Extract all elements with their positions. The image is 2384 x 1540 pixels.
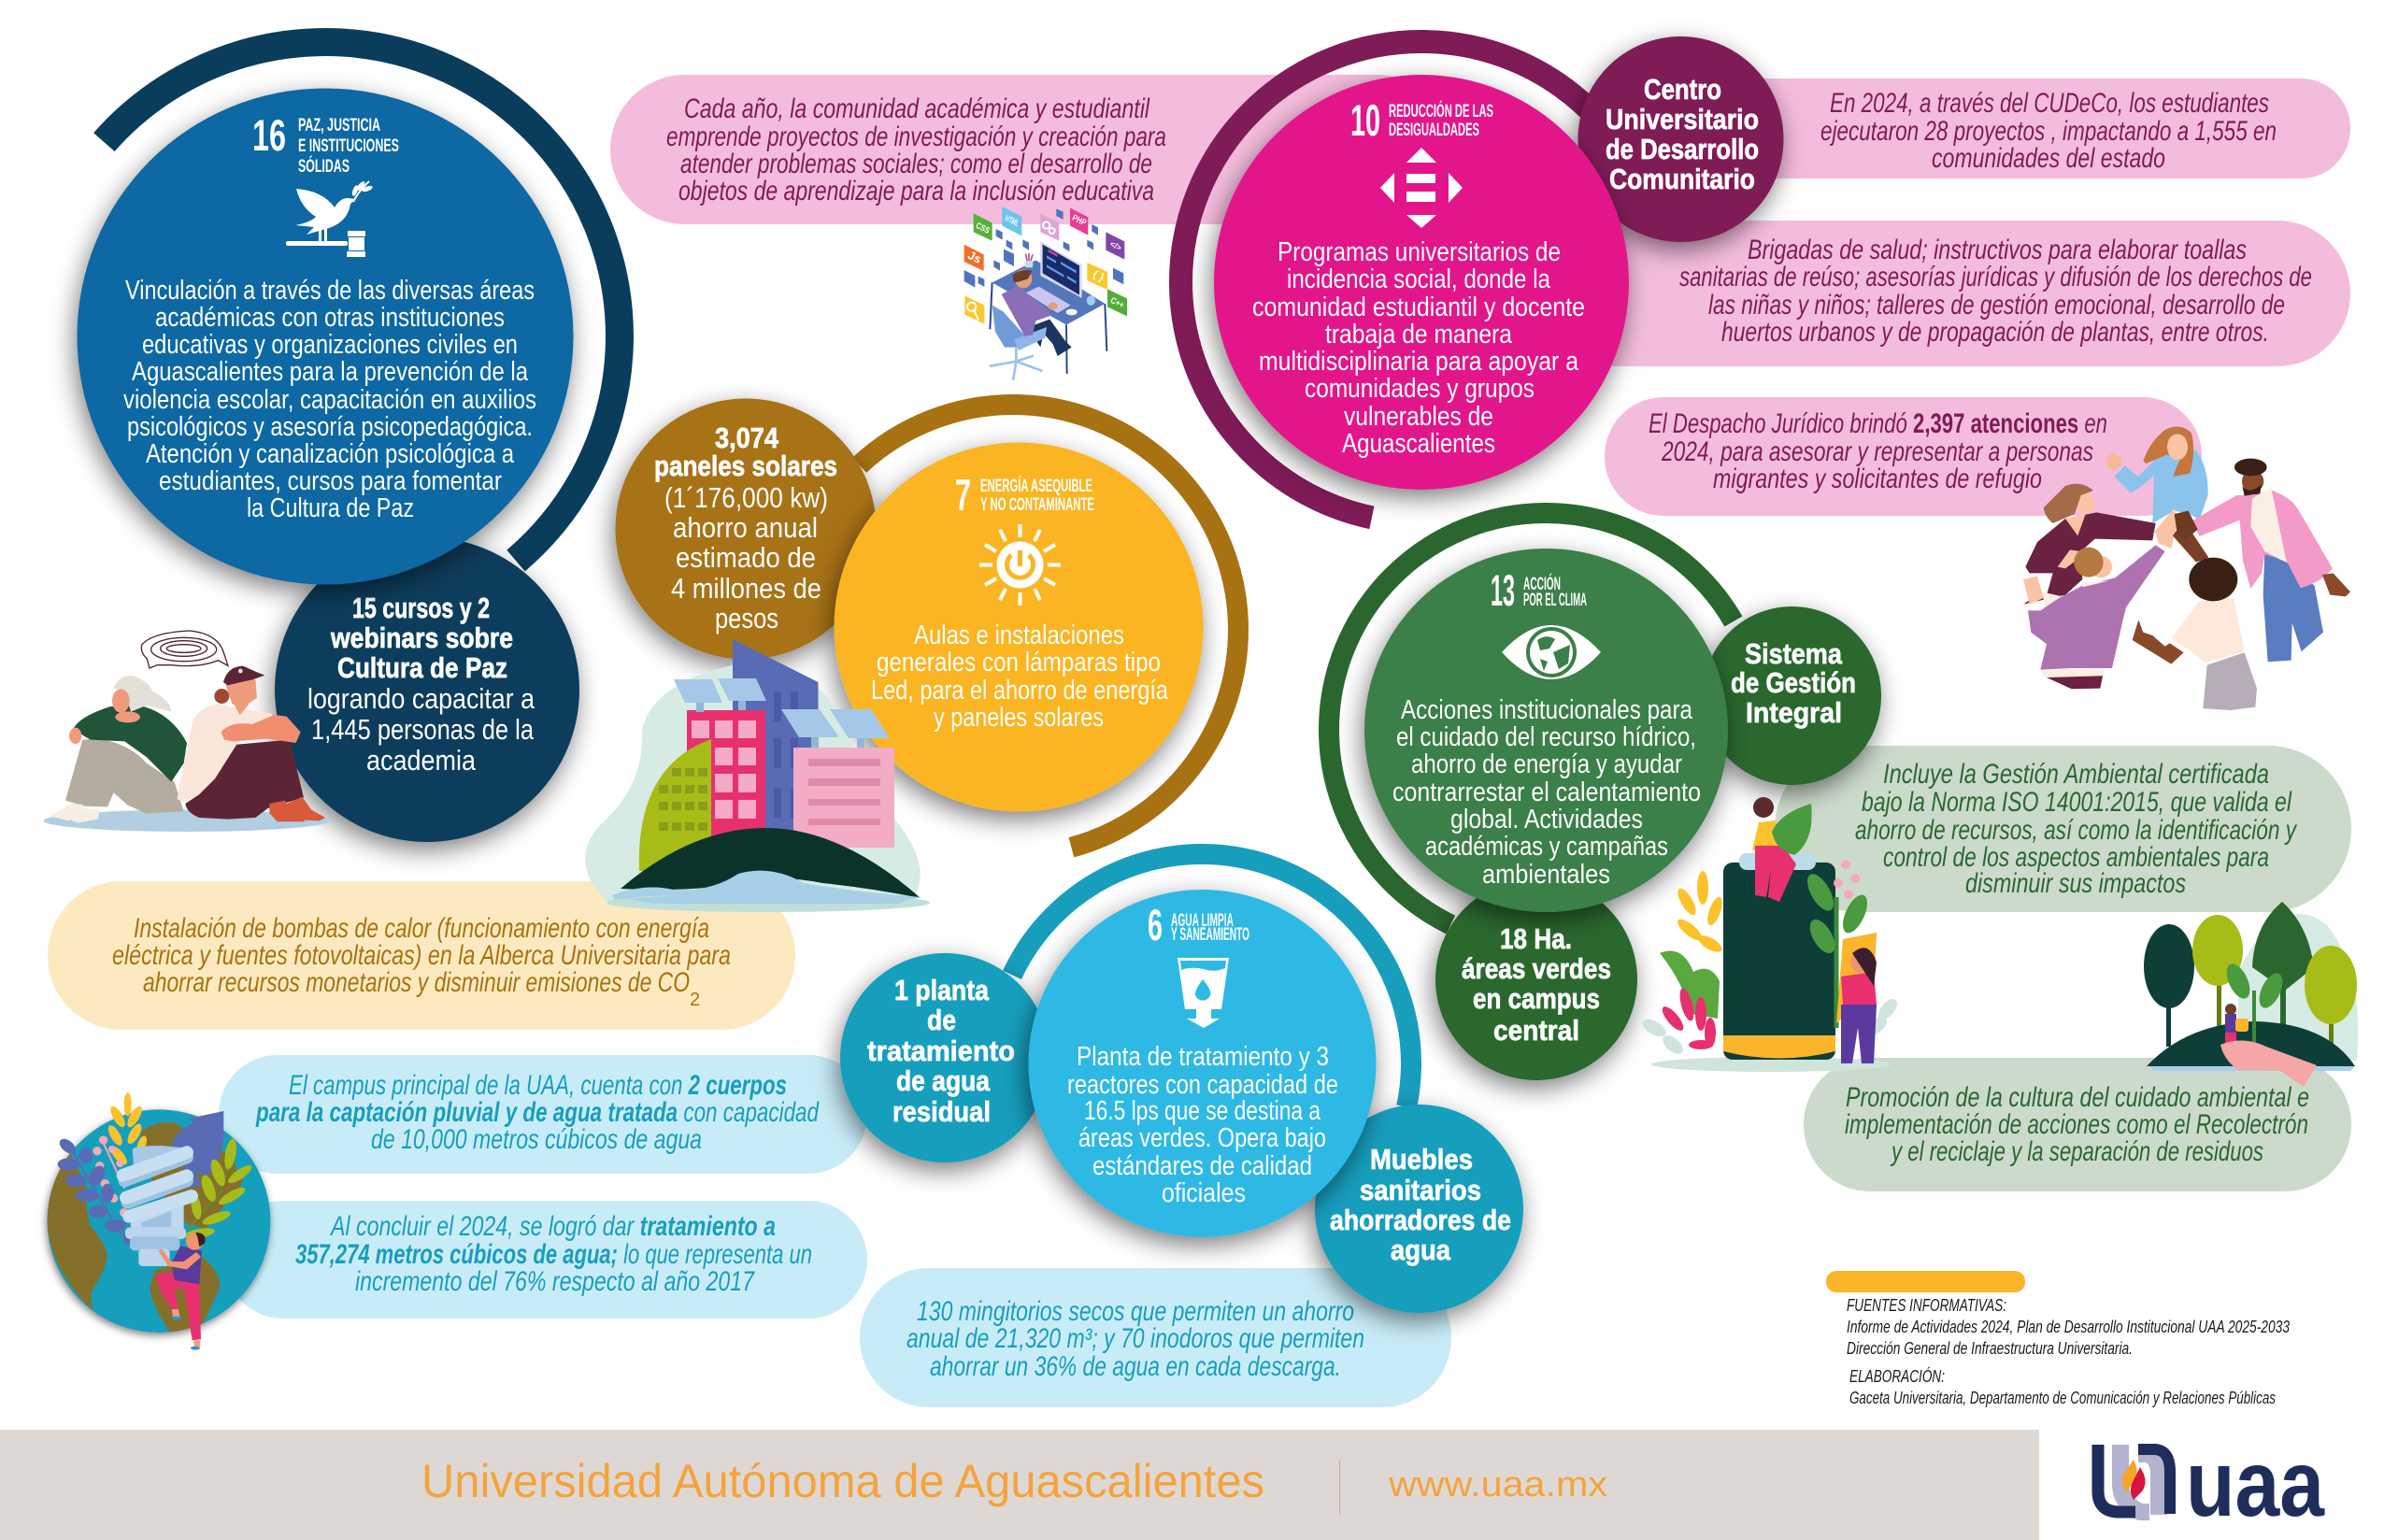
description: Programas universitarios de (1278, 237, 1561, 267)
circle: treatment plant: de agua (896, 1064, 991, 1097)
circle: solar panels: 4 millones de (671, 572, 821, 605)
ring (1012, 854, 1411, 1107)
main circle (1364, 549, 1728, 912)
pill: dry urinals (860, 1268, 1451, 1407)
circle: treatment plant: de (927, 1004, 956, 1036)
circle: treatment plant: tratamiento (867, 1034, 1015, 1067)
circle: Centro Universitario de Desarrollo Comunitario: Centro (1644, 73, 1721, 106)
description: Atención y canalización psicológica a (146, 439, 515, 469)
circle: courses and webinars: logrando capacitar a (307, 682, 535, 715)
description: global. Actividades (1450, 805, 1643, 834)
description: estudiantes, cursos para fomentar (159, 466, 502, 496)
pill: annual projects: emprende proyectos de investigación y creación para (666, 121, 1166, 152)
circle: green areas (1435, 878, 1637, 1080)
pill: environmental culture: y el reciclaje y la separación de residuos (1891, 1136, 2263, 1167)
pill: dry urinals: ahorrar un 36% de agua en cada descarga. (930, 1351, 1341, 1382)
description: áreas verdes. Opera bajo (1078, 1123, 1326, 1153)
circle: green areas: en campus (1473, 982, 1600, 1015)
icon: dove and gavel (286, 180, 373, 257)
illustration: column with plants and people (1639, 797, 1901, 1072)
description: Aulas e instalaciones (914, 620, 1124, 650)
goal heading (252, 110, 399, 177)
goal heading: 10 (1350, 95, 1380, 145)
circle: Centro Universitario de Desarrollo Comunitario: Comunitario (1609, 163, 1755, 195)
panel: SDG 10 reduced inequalities (1181, 36, 1783, 518)
pill: treated water: 357,274 metros cúbicos de agua; lo que representa un (295, 1239, 812, 1270)
description (1252, 237, 1585, 459)
description: multidisciplinaria para apoyar a (1259, 347, 1579, 377)
illustration: two people sitting (44, 631, 330, 832)
illustration: programmer at desk: C++ (1109, 295, 1126, 310)
goal heading: 7 (955, 470, 971, 520)
description: Aguascalientes para la prevención de la (132, 357, 529, 387)
goal heading: REDUCCIÓN DE LAS (1389, 101, 1493, 121)
pill: environmental management: control de los aspectos ambientales para (1883, 842, 2269, 873)
illustration: programmer at desk: CSS (974, 220, 992, 235)
icon: sun with power symbol (979, 524, 1061, 606)
goal heading (1491, 565, 1587, 615)
pill: health brigades: Brigadas de salud; instructivos para elaborar toallas (1748, 235, 2247, 265)
circle: solar panels: ahorro anual (673, 511, 818, 544)
description: comunidad estudiantil y docente (1252, 292, 1585, 322)
description: Led, para el ahorro de energía (871, 676, 1169, 706)
pill: heat pumps: ahorrar recursos monetarios y disminuir emisiones de CO (143, 967, 690, 998)
pill: CUDeCo projects: comunidades del estado (1932, 143, 2165, 174)
illustration: people high five (2023, 427, 2350, 710)
pill: treated water: incremento del 76% respecto al año 2017 (355, 1266, 755, 1297)
pill: heat pumps: eléctrica y fuentes fotovoltaicas) en la Alberca Universitaria para (112, 940, 731, 971)
description: ambientales (1482, 860, 1610, 890)
description: Aguascalientes (1342, 429, 1495, 459)
description: violencia escolar, capacitación en auxilios (123, 385, 536, 415)
goal heading: AGUA LIMPIA (1171, 911, 1234, 931)
circle: courses and webinars: 1,445 personas de la (311, 713, 535, 746)
description: reactores con capacidad de (1067, 1070, 1338, 1100)
ring (1329, 513, 1734, 925)
pill: heat pumps (48, 881, 795, 1030)
goal heading: ENERGÍA ASEQUIBLE (980, 476, 1092, 496)
description: académicas con otras instituciones (155, 303, 505, 333)
circle: sanitary furniture: agua (1391, 1233, 1451, 1266)
goal heading: POR EL CLIMA (1523, 591, 1587, 610)
pill: rainwater bodies: de 10,000 metros cúbicos de agua (371, 1124, 702, 1155)
circle: treatment plant: residual (892, 1095, 991, 1128)
circle: courses and webinars: webinars sobre (330, 621, 513, 654)
circle: solar panels: estimado de (676, 541, 816, 574)
pill: treated water (224, 1201, 867, 1319)
description: vulnerables de (1344, 402, 1493, 432)
panel: SDG 16 peace and justice (77, 42, 620, 842)
icon: inequality arrows (1380, 148, 1463, 228)
sources and credits: ELABORACIÓN: (1849, 1366, 1945, 1386)
circle: treatment plant (840, 953, 1049, 1162)
illustration: globe with light bulb (47, 1092, 270, 1350)
pill: environmental management (1775, 746, 2351, 912)
icon: eye with globe (1502, 625, 1601, 679)
description: la Cultura de Paz (247, 493, 414, 523)
circle: courses and webinars (275, 537, 579, 842)
circle: sanitary furniture: Muebles (1370, 1143, 1473, 1176)
goal heading: PAZ, JUSTICIA (298, 116, 380, 135)
goal heading (1148, 900, 1249, 949)
circle: solar panels: paneles solares (654, 449, 837, 482)
sources and credits (1847, 1296, 2290, 1407)
pill: environmental management: disminuir sus impactos (1965, 868, 2186, 899)
goal heading: ACCIÓN (1523, 574, 1561, 594)
circle: sanitary furniture (1315, 1105, 1523, 1313)
circle: treatment plant: 1 planta (894, 974, 990, 1006)
description (1067, 1042, 1338, 1208)
footer: university name: Universidad Autónoma de Aguascalientes (421, 1455, 1264, 1507)
description (1392, 695, 1701, 890)
circle: courses and webinars: academia (366, 744, 477, 777)
circle: Centro Universitario de Desarrollo Comunitario (1577, 36, 1783, 242)
circle: integrated management system: de Gestión (1731, 666, 1856, 699)
footer band (0, 1430, 2039, 1540)
goal heading: Y NO CONTAMINANTE (980, 495, 1094, 515)
main circle (77, 88, 574, 585)
circle: sanitary furniture: ahorradores de (1330, 1204, 1511, 1236)
illustration: programmer at desk: { } (1091, 269, 1106, 284)
description: incidencia social, donde la (1287, 264, 1551, 294)
circle: solar panels: 3,074 (715, 421, 779, 454)
sources and credits: FUENTES INFORMATIVAS: (1847, 1296, 2006, 1315)
description: contrarrestar el calentamiento (1392, 777, 1701, 807)
pill: legal office (1605, 397, 2202, 516)
ring (860, 405, 1238, 848)
circle: courses and webinars: 15 cursos y 2 (352, 592, 490, 624)
footer: website: www.uaa.mx (1388, 1465, 1607, 1504)
circle: Centro Universitario de Desarrollo Comunitario: Universitario (1606, 103, 1759, 135)
description: psicológicos y asesoría psicopedagógica. (127, 412, 533, 442)
goal heading (955, 470, 1094, 520)
pill: environmental culture (1804, 1058, 2351, 1191)
illustration: programmer at desk: HTML (1004, 213, 1021, 229)
goal heading: 13 (1491, 565, 1515, 615)
goal heading: 6 (1148, 900, 1163, 949)
pill: environmental management: Incluye la Gestión Ambiental certificada (1883, 759, 2269, 790)
circle: sanitary furniture: sanitarios (1360, 1174, 1481, 1206)
goal heading: 16 (252, 110, 286, 160)
pill: legal office: El Despacho Jurídico brindó 2,397 atenciones en (1649, 408, 2107, 439)
pill: health brigades (1542, 221, 2350, 366)
goal heading: E INSTITUCIONES (298, 136, 399, 156)
illustration: programmer at desk: </> (1108, 239, 1123, 252)
pill: rainwater bodies: El campus principal de la UAA, cuenta con 2 cuerpos (289, 1070, 787, 1101)
description (871, 620, 1169, 733)
goal heading: SÓLIDAS (298, 156, 350, 177)
circle: green areas: 18 Ha. (1500, 922, 1572, 955)
pill: annual projects: objetos de aprendizaje para la inclusión educativa (678, 176, 1154, 207)
pill: annual projects: atender problemas sociales; como el desarrollo de (680, 149, 1152, 179)
circle: integrated management system: Integral (1746, 696, 1842, 729)
circle: solar panels: pesos (715, 602, 778, 635)
icon: water glass (1178, 958, 1229, 1028)
pill: treated water: Al concluir el 2024, se logró dar tratamiento a (329, 1211, 776, 1242)
goal heading: Y SANEAMIENTO (1171, 925, 1249, 945)
description: académicas y campañas (1425, 832, 1668, 862)
circle: solar panels (615, 398, 877, 660)
pill: rainwater bodies: para la captación pluvial y de agua tratada con capacidad (255, 1097, 820, 1128)
pill: legal office: migrantes y solicitantes de refugio (1713, 463, 2042, 494)
circle: green areas: central (1493, 1014, 1579, 1047)
description: Acciones institucionales para (1401, 695, 1693, 725)
goal heading (1350, 95, 1493, 145)
description: educativas y organizaciones civiles en (142, 330, 518, 360)
description: Vinculación a través de las diversas áreas (125, 276, 535, 306)
description: estándares de calidad (1092, 1151, 1312, 1181)
circle: green areas: áreas verdes (1462, 952, 1611, 985)
pill: dry urinals: 130 mingitorios secos que permiten un ahorro (917, 1296, 1354, 1327)
pill: dry urinals: anual de 21,320 m³; y 70 inodoros que permiten (906, 1323, 1364, 1354)
ring (104, 42, 620, 561)
pill: rainwater bodies (219, 1055, 867, 1174)
description: generales con lámparas tipo (877, 648, 1161, 677)
pill: CUDeCo projects (1682, 78, 2350, 178)
pill: annual projects (610, 75, 1451, 224)
circle: integrated management system: Sistema (1745, 637, 1843, 670)
main circle (1028, 890, 1376, 1237)
illustration: buildings with solar panels (585, 639, 930, 912)
description: oficiales (1162, 1178, 1246, 1208)
description: el cuidado del recurso hídrico, (1396, 722, 1696, 752)
illustration: programmer at desk: Js (965, 249, 983, 266)
description: 16.5 lps que se destina a (1084, 1096, 1321, 1126)
illustration: programmer at desk: PHP (1071, 212, 1089, 228)
pill: annual projects: Cada año, la comunidad académica y estudiantil (684, 93, 1150, 124)
illustration: hand holding trees (2144, 902, 2358, 1087)
logo: UAA: uaa (2186, 1432, 2325, 1536)
description: y paneles solares (934, 703, 1104, 733)
description: Planta de tratamiento y 3 (1077, 1042, 1329, 1072)
panel: SDG 7 clean energy (615, 398, 1238, 848)
circle: solar panels: (1´176,000 kw) (664, 481, 828, 514)
pill: heat pumps: 2 (690, 990, 700, 1010)
description: ahorro de energía y ayudar (1411, 749, 1682, 779)
circle: Centro Universitario de Desarrollo Comunitario: de Desarrollo (1606, 133, 1759, 165)
panel: SDG 13 climate action (1329, 513, 1881, 1080)
yellow accent bar (1826, 1271, 2025, 1292)
description: comunidades y grupos (1305, 374, 1535, 404)
sources and credits: Dirección General de Infraestructura Universitaria. (1847, 1339, 2133, 1358)
description (123, 276, 536, 523)
main circle (1214, 75, 1629, 490)
logo: UAA (2098, 1432, 2325, 1536)
main circle (834, 443, 1204, 811)
circle: courses and webinars: Cultura de Paz (337, 651, 507, 684)
ring (1181, 41, 1592, 518)
circle: integrated management system (1703, 606, 1881, 785)
pill: legal office: 2024, para asesorar y representar a personas (1661, 436, 2093, 467)
illustration: programmer at desk (964, 207, 1127, 379)
goal heading: DESIGUALDADES (1389, 121, 1479, 140)
pill: heat pumps: Instalación de bombas de calor (funcionamiento con energía (134, 913, 709, 944)
panel: SDG 6 clean water (840, 854, 1523, 1313)
description: trabaja de manera (1325, 320, 1513, 349)
